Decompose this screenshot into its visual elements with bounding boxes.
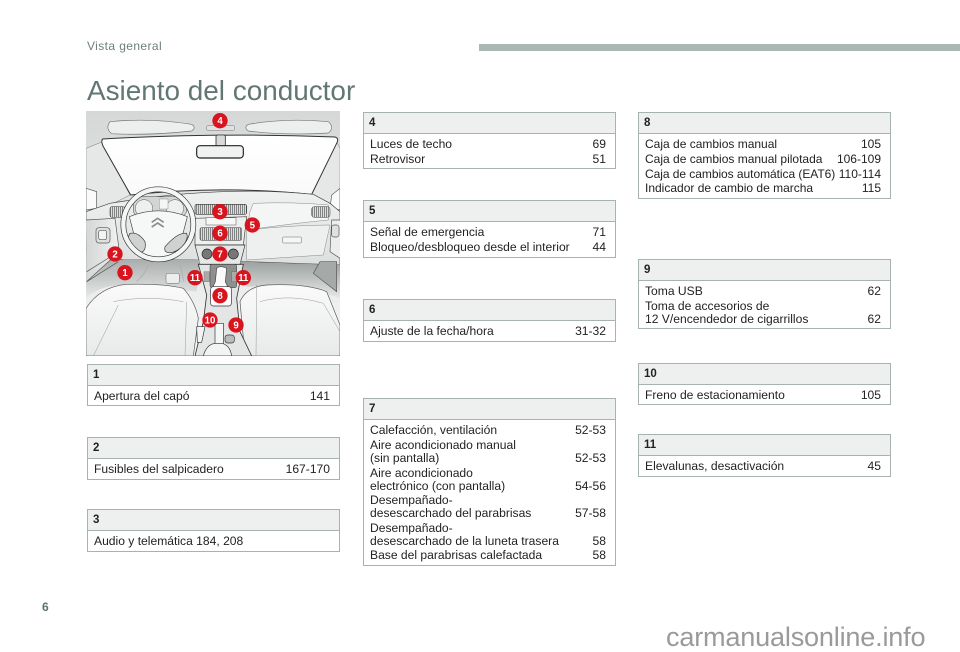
panel 7: Desempañado- [370,493,453,507]
panel 3: 3 [93,514,99,526]
number badges: 11 [238,273,249,284]
panel 3: Audio y telemática 184, 208 [94,534,243,548]
panel 7: (sin pantalla) [370,451,439,465]
panel 7: Calefacción, ventilación [370,423,497,437]
panel 8: Indicador de cambio de marcha [645,181,813,195]
header bar [479,44,960,51]
panel 8: 115 [862,181,881,195]
panel 4: 69 [593,137,606,151]
number badges: 6 [217,229,223,240]
footwell [86,252,340,298]
panel 4: Luces de techo [370,137,452,151]
panel 8: 110-114 [839,167,881,181]
title: Asiento del conductor [87,75,355,106]
panel 6: 6 [369,304,375,316]
panel 7: desescarchado de la luneta trasera [370,534,559,548]
panel 7: desescarchado del parabrisas [370,506,531,520]
number badges: 8 [217,291,223,302]
panel 9: 12 V/encendedor de cigarrillos [645,312,808,326]
panel 4: 51 [593,152,606,166]
panel 5: 71 [593,225,606,239]
panel 10 [638,363,891,405]
rear-view mirror [197,126,243,158]
panel 8: 106-109 [837,152,881,166]
section label: Vista general [87,39,162,53]
panel 1: 141 [310,389,330,403]
watermark: carmanualsonline.info [666,621,925,652]
illustration: driver's cabin [86,111,340,356]
front seats [86,284,340,356]
door panels [86,218,340,292]
panel 3 [87,509,340,552]
panel 6 [363,299,616,342]
panel 1: 1 [93,369,99,381]
panel 4: Retrovisor [370,152,425,166]
panel 9: 62 [868,284,881,298]
number badges: 5 [250,220,256,231]
panel 11: 11 [644,439,656,451]
panel 5: 5 [369,205,375,217]
panel 7: 58 [593,534,606,548]
panel 7: Desempañado- [370,521,453,535]
number badges: 7 [217,249,223,260]
panel 7: 54-56 [575,479,606,493]
sun visors [108,120,332,134]
number badges: 4 [217,116,223,127]
panel 11: 45 [868,459,881,473]
panel 1: Apertura del capó [94,389,189,403]
panel 2: Fusibles del salpicadero [94,462,224,476]
steering wheel [123,189,193,259]
page number: 6 [42,600,49,614]
panel 7: 52-53 [575,423,606,437]
dashboard [86,191,340,265]
panel 7: Aire acondicionado manual [370,438,516,452]
number badges: 1 [122,268,128,279]
panel 9: Toma USB [645,284,703,298]
number badges: 2 [112,249,118,260]
panel 8: 105 [861,137,881,151]
air vents [110,204,330,217]
panel 8 [638,112,891,199]
panel 9: 62 [868,312,881,326]
panel 8: Caja de cambios manual [645,137,777,151]
panel 7: Base del parabrisas calefactada [370,548,542,562]
panel 11 [638,434,891,477]
panel 5: Bloqueo/desbloqueo desde el interior [370,240,570,254]
number badges: 3 [217,207,223,218]
panel 8: 8 [644,117,650,129]
panel 7: Aire acondicionado [370,466,473,480]
centre console [195,217,247,264]
panel 7: 7 [369,403,375,415]
panel 4 [363,112,616,169]
panel 5 [363,200,616,258]
panel 7: electrónico (con pantalla) [370,479,505,493]
panel 8: Caja de cambios manual pilotada [645,152,822,166]
gear lever and tunnel [195,264,252,356]
panel 6: Ajuste de la fecha/hora [370,324,494,338]
panel 2: 2 [93,442,99,454]
panel 7: 58 [593,548,606,562]
panel 10: 10 [644,368,657,380]
panel 7: 57-58 [575,506,606,520]
panel 2 [87,437,340,480]
panel 7: 52-53 [575,451,606,465]
number badges: 10 [205,315,215,326]
panel 10: Freno de estacionamiento [645,388,785,402]
number badges [107,113,260,333]
panel 4: 4 [369,117,375,129]
panel 7 [363,398,616,566]
panel 9 [638,259,891,329]
windshield [102,135,338,195]
panel 11: Elevalunas, desactivación [645,459,784,473]
panel 2: 167-170 [286,462,330,476]
panel 10: 105 [861,388,881,402]
panel 5: Señal de emergencia [370,225,484,239]
panel 5: 44 [593,240,606,254]
panel 9: 9 [644,264,650,276]
number badges: 11 [190,273,201,284]
panel 8: Caja de cambios automática (EAT6) [645,167,835,181]
number badges: 9 [233,320,239,331]
panel 9: Toma de accesorios de [645,299,769,313]
cabin background [86,111,340,356]
panel 1 [87,364,340,406]
panel 6: 31-32 [575,324,606,338]
